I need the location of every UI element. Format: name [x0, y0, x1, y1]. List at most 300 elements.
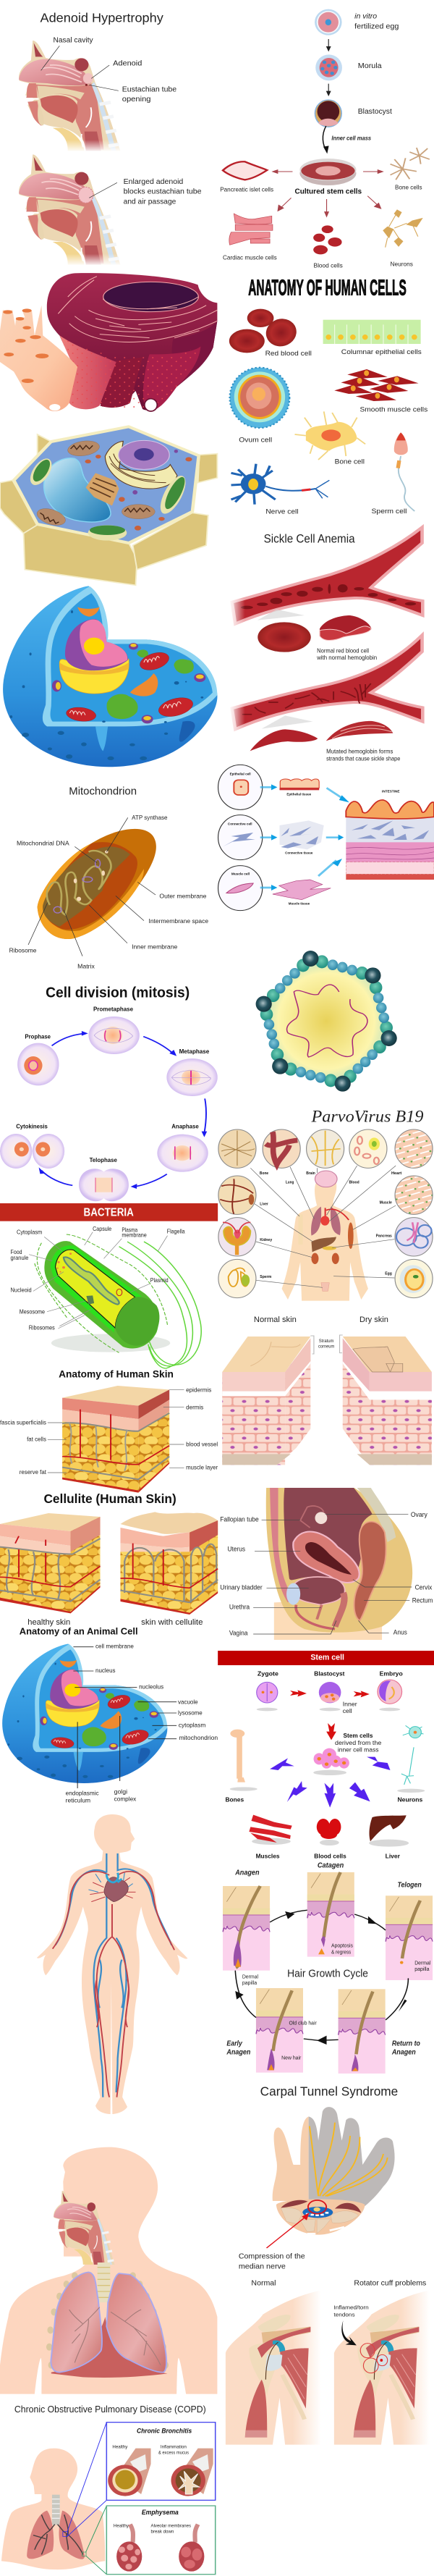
label: Adenoid: Adenoid	[113, 59, 142, 67]
lungs	[27, 2511, 85, 2559]
mitochondria	[34, 439, 155, 529]
label: Ribosome: Ribosome	[9, 947, 37, 954]
label: INTESTINE: INTESTINE	[382, 790, 400, 794]
icon: sperm cell	[394, 432, 414, 511]
label: Nerve cell: Nerve cell	[265, 508, 298, 515]
label: Smooth muscle cells: Smooth muscle cells	[359, 406, 427, 413]
labels: reticulum	[66, 1797, 90, 1803]
fat layer	[266, 1488, 412, 1633]
label: Sperm cell: Sperm cell	[372, 508, 407, 515]
spine	[357, 1488, 396, 1542]
great vessels	[106, 1873, 122, 1882]
label: Nasal cavity: Nasal cavity	[53, 36, 93, 44]
hole in tube	[49, 404, 60, 411]
labels: phases: Catagen	[318, 1861, 344, 1869]
title: Carpal Tunnel Syndrome: Carpal Tunnel Syndrome	[260, 2084, 398, 2099]
label: Matrix: Matrix	[77, 963, 95, 969]
labels: parts: Old club hair	[289, 2020, 317, 2026]
lens detail: pancreas	[396, 1222, 432, 1248]
labels: Ribosomes	[29, 1324, 55, 1331]
label: Healthy: Healthy	[114, 2523, 129, 2529]
icon: petri dish	[299, 159, 356, 185]
median nerve spot	[314, 2207, 320, 2212]
skin right face	[138, 1389, 169, 1493]
end cap	[115, 1297, 159, 1346]
labels: Capsule	[93, 1226, 111, 1232]
abdominal cavity	[284, 1488, 373, 1580]
panel: rotator cuff	[226, 2279, 430, 2445]
icon: stem cell cluster	[314, 1748, 349, 1769]
label: Anaphase: Anaphase	[171, 1123, 199, 1129]
title: ParvoVirus B19: ParvoVirus B19	[311, 1108, 424, 1126]
icon: pancreatic islet cells	[223, 161, 267, 180]
golgi	[86, 473, 119, 505]
sheet: pink front	[59, 335, 116, 409]
labels: phases: Anagen	[391, 2048, 416, 2056]
labels: Vagina	[229, 1630, 248, 1637]
icon: neuron	[401, 1725, 423, 1785]
box: chronic bronchitis	[106, 2423, 216, 2500]
tube openings	[3, 308, 48, 383]
cell membrane border	[14, 426, 199, 543]
block: healthy skin	[0, 1513, 101, 1613]
label: Eustachian tube opening: Eustachian tube	[122, 85, 176, 93]
nucleus	[119, 440, 169, 469]
normal cells in vessel	[241, 584, 416, 609]
lens detail: liver	[220, 1179, 254, 1214]
shadow	[51, 1334, 170, 1352]
bronchi branches	[69, 2307, 161, 2365]
labels: granule	[11, 1255, 29, 1261]
icon: cardiac muscle cells	[229, 214, 273, 245]
pili	[35, 1234, 168, 1352]
panel: anatomy of human skin block	[0, 1386, 218, 1493]
veins	[56, 1853, 171, 2097]
leader lines	[41, 46, 119, 198]
nuclei	[318, 1753, 346, 1766]
labels: complex	[114, 1796, 137, 1802]
icon: muscles	[249, 1815, 292, 1843]
leader lines	[73, 1647, 176, 1788]
dark vertex beads	[256, 951, 397, 1092]
body silhouette	[282, 1171, 368, 1301]
panel: circulatory system body	[37, 1814, 187, 2114]
label: Mutated hemoglobin: Mutated hemoglobin forms	[326, 748, 393, 755]
panel: respiratory system	[0, 2147, 217, 2394]
labels: golgi	[114, 1788, 127, 1795]
cycle arrows	[235, 1910, 408, 2040]
bladder	[292, 1577, 345, 1605]
labels: cell membrane	[95, 1643, 134, 1650]
skin left face	[62, 1398, 138, 1493]
nucleoid	[64, 1257, 119, 1305]
endoplasmic reticulum	[105, 441, 177, 489]
label: skin with cellulite: skin with cellulite	[141, 1617, 203, 1627]
left lung	[51, 2272, 102, 2373]
stage: prophase	[17, 1043, 59, 1085]
label: Stem cells derived: inner cell mass	[338, 1746, 379, 1753]
lens detail: lung	[265, 1132, 297, 1164]
panel: female reproductive anatomy	[220, 1488, 433, 1640]
small vesicles	[85, 450, 192, 531]
label: ATP synthase: ATP synthase	[132, 815, 168, 821]
label: Alveolar membranes break down: Alveolar membranes	[151, 2523, 191, 2529]
icon: nerve cell	[231, 464, 329, 505]
hair panel: catagen	[307, 1872, 354, 1957]
label: Metaphase: Metaphase	[179, 1048, 209, 1055]
labels: phases: Early	[226, 2040, 243, 2047]
labels: lysosome	[178, 1709, 203, 1717]
labels: cytoplasm	[179, 1722, 205, 1729]
label: Enlarged adenoid: Enlarged adenoid	[124, 178, 183, 186]
lens detail: sperm	[229, 1268, 250, 1287]
sickled cells in vessel	[242, 683, 371, 715]
highlight cone	[258, 610, 305, 620]
icon: blood cells cluster	[317, 1819, 341, 1839]
labels: blood vessel	[186, 1441, 218, 1448]
organelle	[28, 817, 156, 956]
leader lines	[29, 1232, 168, 1329]
label: in vitro fertilized egg: in vitro	[354, 12, 377, 20]
arrows: red	[290, 1690, 370, 1740]
label: Muscle cell: Muscle cell	[231, 872, 250, 876]
capsid interior	[264, 959, 389, 1084]
labels: Nucleoid	[11, 1287, 32, 1294]
bright inner ring	[51, 1245, 142, 1333]
label: Blood cells: Blood cells	[314, 262, 343, 269]
arrows: differentiation	[273, 170, 383, 216]
wrist cross-section	[276, 2200, 365, 2235]
label: Epithelial cell: Epithelial cell	[230, 773, 251, 775]
zoom source markers	[63, 2532, 86, 2556]
labels: vacuole	[178, 1699, 198, 1705]
leader lines	[253, 1514, 412, 1634]
labels: derived cells: Bones	[225, 1796, 244, 1803]
labels: mitochondrion	[179, 1735, 218, 1741]
cell walls	[0, 434, 217, 585]
lumen: dark opening	[103, 282, 198, 312]
left fade	[229, 704, 245, 733]
icon: columnar epithelial cells	[323, 320, 421, 344]
title: COPD: Chronic Obstructive Pulmonary Disease (COPD)	[14, 2404, 206, 2415]
reproductive organ	[321, 1283, 329, 1291]
lens detail: bone	[221, 1131, 255, 1166]
icon: sickle cell	[250, 729, 318, 751]
red arrow	[266, 2213, 310, 2248]
labels: parts: & regress	[331, 1949, 351, 1955]
label: Eustachian tube opening: opening	[122, 96, 151, 104]
labels: stages: Zygote	[258, 1670, 278, 1678]
labels: derived cells: Muscles	[256, 1853, 279, 1860]
label: Pancreatic islet cells: Pancreatic islet cells	[220, 186, 274, 193]
box title: Chronic Bronchitis: Chronic Bronchitis	[137, 2428, 192, 2435]
labels: Ovary	[411, 1512, 427, 1519]
trachea	[52, 2495, 60, 2525]
label: Telophase: Telophase	[90, 1157, 117, 1163]
viral DNA	[287, 985, 367, 1057]
arrows: purple	[270, 1757, 391, 1808]
label: Epithelial tissue: Epithelial tissue	[286, 793, 311, 796]
label: Enlarged adenoid: and air passage	[124, 198, 176, 206]
labels: Plasma	[122, 1226, 137, 1234]
labels: parts: New hair	[281, 2055, 302, 2061]
label: Alveolar membranes break down: break down	[151, 2529, 174, 2534]
labels: organs: Lung	[286, 1181, 294, 1184]
cytoplasm	[56, 1250, 135, 1328]
label: Inflamed/torn tendons: tendons	[333, 2312, 355, 2318]
icon: blastocyst	[319, 1682, 341, 1703]
stage: cytokinesis	[0, 1134, 64, 1169]
icon: cut-away red blood cell	[320, 615, 372, 640]
icon: blood cells	[313, 225, 342, 254]
tunnel	[302, 2207, 333, 2218]
plasmid	[116, 1289, 122, 1296]
labels: Urethra	[229, 1604, 250, 1611]
left fade	[229, 599, 245, 626]
brain	[315, 1171, 337, 1187]
label: Stem cells derived: derived from the	[335, 1740, 381, 1746]
labels: organs: Brain	[306, 1171, 315, 1176]
skin base	[274, 1598, 393, 1640]
bronchi	[33, 2514, 83, 2554]
labels: parts: papilla	[414, 1966, 430, 1972]
icon: damaged alveoli	[179, 2525, 204, 2572]
panel: cell division mitosis	[0, 984, 218, 1201]
labels: nucleus	[95, 1667, 116, 1674]
lens detail: brain	[311, 1131, 341, 1166]
lens detail: egg	[400, 1265, 426, 1293]
labels: organs: Kidney	[260, 1238, 273, 1242]
panel: COPD	[1, 2404, 216, 2575]
labels: organs: Egg	[385, 1272, 392, 1276]
muscle nuclei	[351, 370, 399, 399]
label: Prometaphase: Prometaphase	[93, 1006, 133, 1013]
skin block: dry	[343, 1337, 432, 1465]
compression circle	[308, 2200, 326, 2214]
icon: embryo	[378, 1680, 402, 1704]
organelle body	[47, 273, 217, 411]
kidneys	[311, 1253, 339, 1264]
labels: Anus	[393, 1629, 407, 1636]
blue beads	[264, 959, 389, 1083]
box title: Emphysema: Emphysema	[142, 2509, 179, 2517]
label: Stratum corneum: Stratum	[319, 1339, 333, 1344]
label: Inner membrane: Inner membrane	[132, 943, 177, 951]
sheet: lower red lobe	[143, 346, 200, 411]
panel: parvovirus B19 capsid	[256, 951, 424, 1126]
icon: fertilized egg	[315, 9, 342, 35]
label: Cultured stem cells: Cultured stem cells	[295, 188, 362, 195]
labels: membrane	[122, 1232, 147, 1239]
labels: Flagella	[167, 1228, 185, 1235]
labels: derived cells: Neurons	[397, 1796, 422, 1803]
labels: Fallopian tube	[220, 1516, 259, 1523]
panel: cellulite comparison	[0, 1491, 218, 1803]
body silhouette	[37, 1814, 187, 2114]
leader lines	[250, 1166, 396, 1287]
title: Anatomy of an Animal Cell: Anatomy of an Animal Cell	[20, 1626, 138, 1636]
stage: metaphase	[166, 1058, 218, 1096]
tendons	[306, 2212, 344, 2234]
label: Columnar epithelial cells: Columnar epithelial cells	[341, 349, 422, 356]
arrow: curved to culture	[323, 126, 329, 153]
panel: human cell types	[229, 309, 427, 545]
label: Normal red blood cell: with normal hemoglobin	[316, 654, 377, 661]
ribs	[46, 2272, 169, 2369]
trachea	[98, 2263, 110, 2302]
label: Muscle tissue: Muscle tissue	[289, 902, 310, 906]
sheet opening	[145, 399, 157, 411]
label: Connective tissue: Connective tissue	[285, 851, 313, 855]
icon: bone	[230, 1730, 245, 1782]
tissue lenses	[218, 1129, 433, 1298]
title: Anatomy of Human Skin: Anatomy of Human Skin	[59, 1369, 174, 1380]
label: Inner cell: cell	[343, 1708, 352, 1714]
cisternae: pale sheets	[58, 277, 217, 342]
label: Inflammation excess mucus: Inflammation	[161, 2444, 187, 2450]
labels: organs: Muscle	[380, 1201, 392, 1205]
head and torso silhouette	[0, 2147, 217, 2394]
flagella	[119, 1242, 201, 1368]
labels: Urinary bladder	[220, 1584, 263, 1591]
labels: stages: Blastocyst	[314, 1670, 344, 1678]
label: healthy skin: healthy skin	[27, 1617, 70, 1627]
label: Intermembrane space: Intermembrane space	[148, 918, 208, 925]
panel: sickle cell anemia	[229, 527, 422, 762]
labels: Food	[11, 1249, 22, 1255]
label: Compression of the median nerve: median nerve	[239, 2263, 286, 2270]
panel: parvovirus target tissues	[218, 1129, 433, 1301]
ER stripes	[109, 454, 166, 483]
matrix	[43, 846, 130, 927]
label: Normal skin: Normal skin	[254, 1315, 297, 1324]
label: Blastocyst: Blastocyst	[358, 108, 392, 116]
arrow heads	[235, 1911, 407, 2045]
labels: fascia superficialis	[0, 1419, 46, 1426]
icon: bone cell	[295, 411, 365, 460]
arteries	[326, 1208, 349, 1220]
smooth ER tubes	[0, 306, 77, 411]
label: Morula: Morula	[358, 62, 382, 70]
title: Sickle Cell Anemia: Sickle Cell Anemia	[264, 531, 355, 545]
teal beads	[260, 955, 393, 1087]
upper airway	[54, 2191, 114, 2265]
vessel: sickle	[232, 635, 422, 729]
panel: rough endoplasmic reticulum and smooth ER	[0, 273, 217, 411]
fascia and vessels	[62, 1410, 169, 1479]
icon: normal red blood cell	[258, 622, 311, 652]
label: Outer membrane: Outer membrane	[159, 893, 206, 900]
banner	[218, 1651, 434, 1665]
title: Cellulite (Human Skin): Cellulite (Human Skin)	[43, 1491, 176, 1506]
skin block: normal	[222, 1337, 310, 1465]
sheet: middle dark lobe	[101, 357, 142, 408]
hand: palm left	[273, 2116, 309, 2201]
icon: connective tissue	[279, 820, 324, 849]
lungs	[311, 1207, 341, 1236]
label: Connective cell: Connective cell	[228, 822, 252, 826]
panel: animal cell cutaway	[3, 586, 217, 767]
thenar muscles	[281, 2200, 361, 2213]
labels: parts: Dermal	[414, 1960, 431, 1966]
icon: muscle tissue	[273, 880, 331, 900]
labels: parts: Dermal	[242, 1974, 258, 1979]
title: Adenoid Hypertrophy: Adenoid Hypertrophy	[40, 11, 163, 25]
labels: phases: Return to	[392, 2040, 420, 2047]
hair panel: telogen	[386, 1895, 433, 1980]
label: Mitochondrial DNA: Mitochondrial DNA	[17, 840, 69, 847]
box: emphysema	[106, 2506, 216, 2575]
chloroplasts	[26, 455, 191, 541]
title: Hair Growth Cycle: Hair Growth Cycle	[287, 1969, 368, 1979]
icon: blastocyst	[315, 100, 341, 127]
panel: mitochondrion	[9, 786, 208, 969]
icon: bone cells	[391, 148, 430, 180]
heart	[320, 1216, 329, 1226]
panel: tissue types forming intestine	[218, 765, 434, 911]
label: Normal: Normal	[251, 2279, 276, 2287]
labels: organs: Pancreas	[376, 1234, 392, 1238]
icon: healthy alveoli	[116, 2525, 142, 2572]
icon: connective cell	[223, 833, 255, 846]
capsule	[44, 1241, 158, 1348]
skin top	[62, 1386, 169, 1406]
sheet: dark right	[172, 321, 217, 386]
label: Mutated hemoglobin: strands that cause sickle shape	[326, 755, 400, 762]
pancreas	[323, 1246, 336, 1250]
fallopian tube and ovary	[300, 1506, 327, 1528]
zoom lines: green	[86, 2506, 106, 2575]
panel: stem cell differentiation	[220, 9, 430, 269]
icon: ovum cell	[230, 368, 289, 428]
labels: dermis	[186, 1404, 204, 1411]
label: Bone cell: Bone cell	[335, 458, 365, 466]
icon: epithelial cell	[234, 780, 248, 795]
labels: parts: Apoptosis	[331, 1942, 353, 1949]
icon: neurons	[383, 210, 422, 248]
highlight cone	[262, 715, 312, 729]
banner	[0, 1203, 218, 1221]
hair panel: early anagen	[256, 1988, 303, 2073]
label: Bone cells: Bone cells	[395, 184, 422, 190]
leader lines	[28, 817, 156, 956]
icon: sickle cell with strands	[326, 721, 393, 741]
labels: organs: Heart	[391, 1171, 401, 1176]
icon: inflamed airway	[171, 2449, 213, 2496]
icon: epithelial tissue	[279, 779, 319, 790]
arteries	[53, 1872, 174, 2097]
diaphragm	[51, 2317, 168, 2378]
illustration: normal head cross-section	[17, 41, 124, 152]
heart	[104, 1877, 128, 1902]
bone and muscle	[298, 1214, 354, 1249]
dots: ribosomes	[59, 335, 200, 411]
panel: bacteria	[0, 1203, 218, 1380]
label: in vitro fertilized egg: fertilized egg	[354, 22, 399, 30]
hair panel: anagen	[223, 1886, 270, 1971]
label: Prophase: Prophase	[25, 1033, 51, 1040]
stage: telophase	[79, 1169, 129, 1201]
uterine cavity	[305, 1542, 352, 1575]
liver	[311, 1237, 336, 1252]
circles: cell lenses	[218, 765, 263, 911]
label: Dry skin: Dry skin	[359, 1315, 388, 1324]
panel: carpal tunnel syndrome	[239, 2084, 398, 2270]
icon: red blood cells	[229, 309, 302, 353]
arrows: blue	[260, 784, 349, 891]
arrows between stages	[326, 39, 331, 96]
labels: organs: Blood	[349, 1181, 359, 1184]
